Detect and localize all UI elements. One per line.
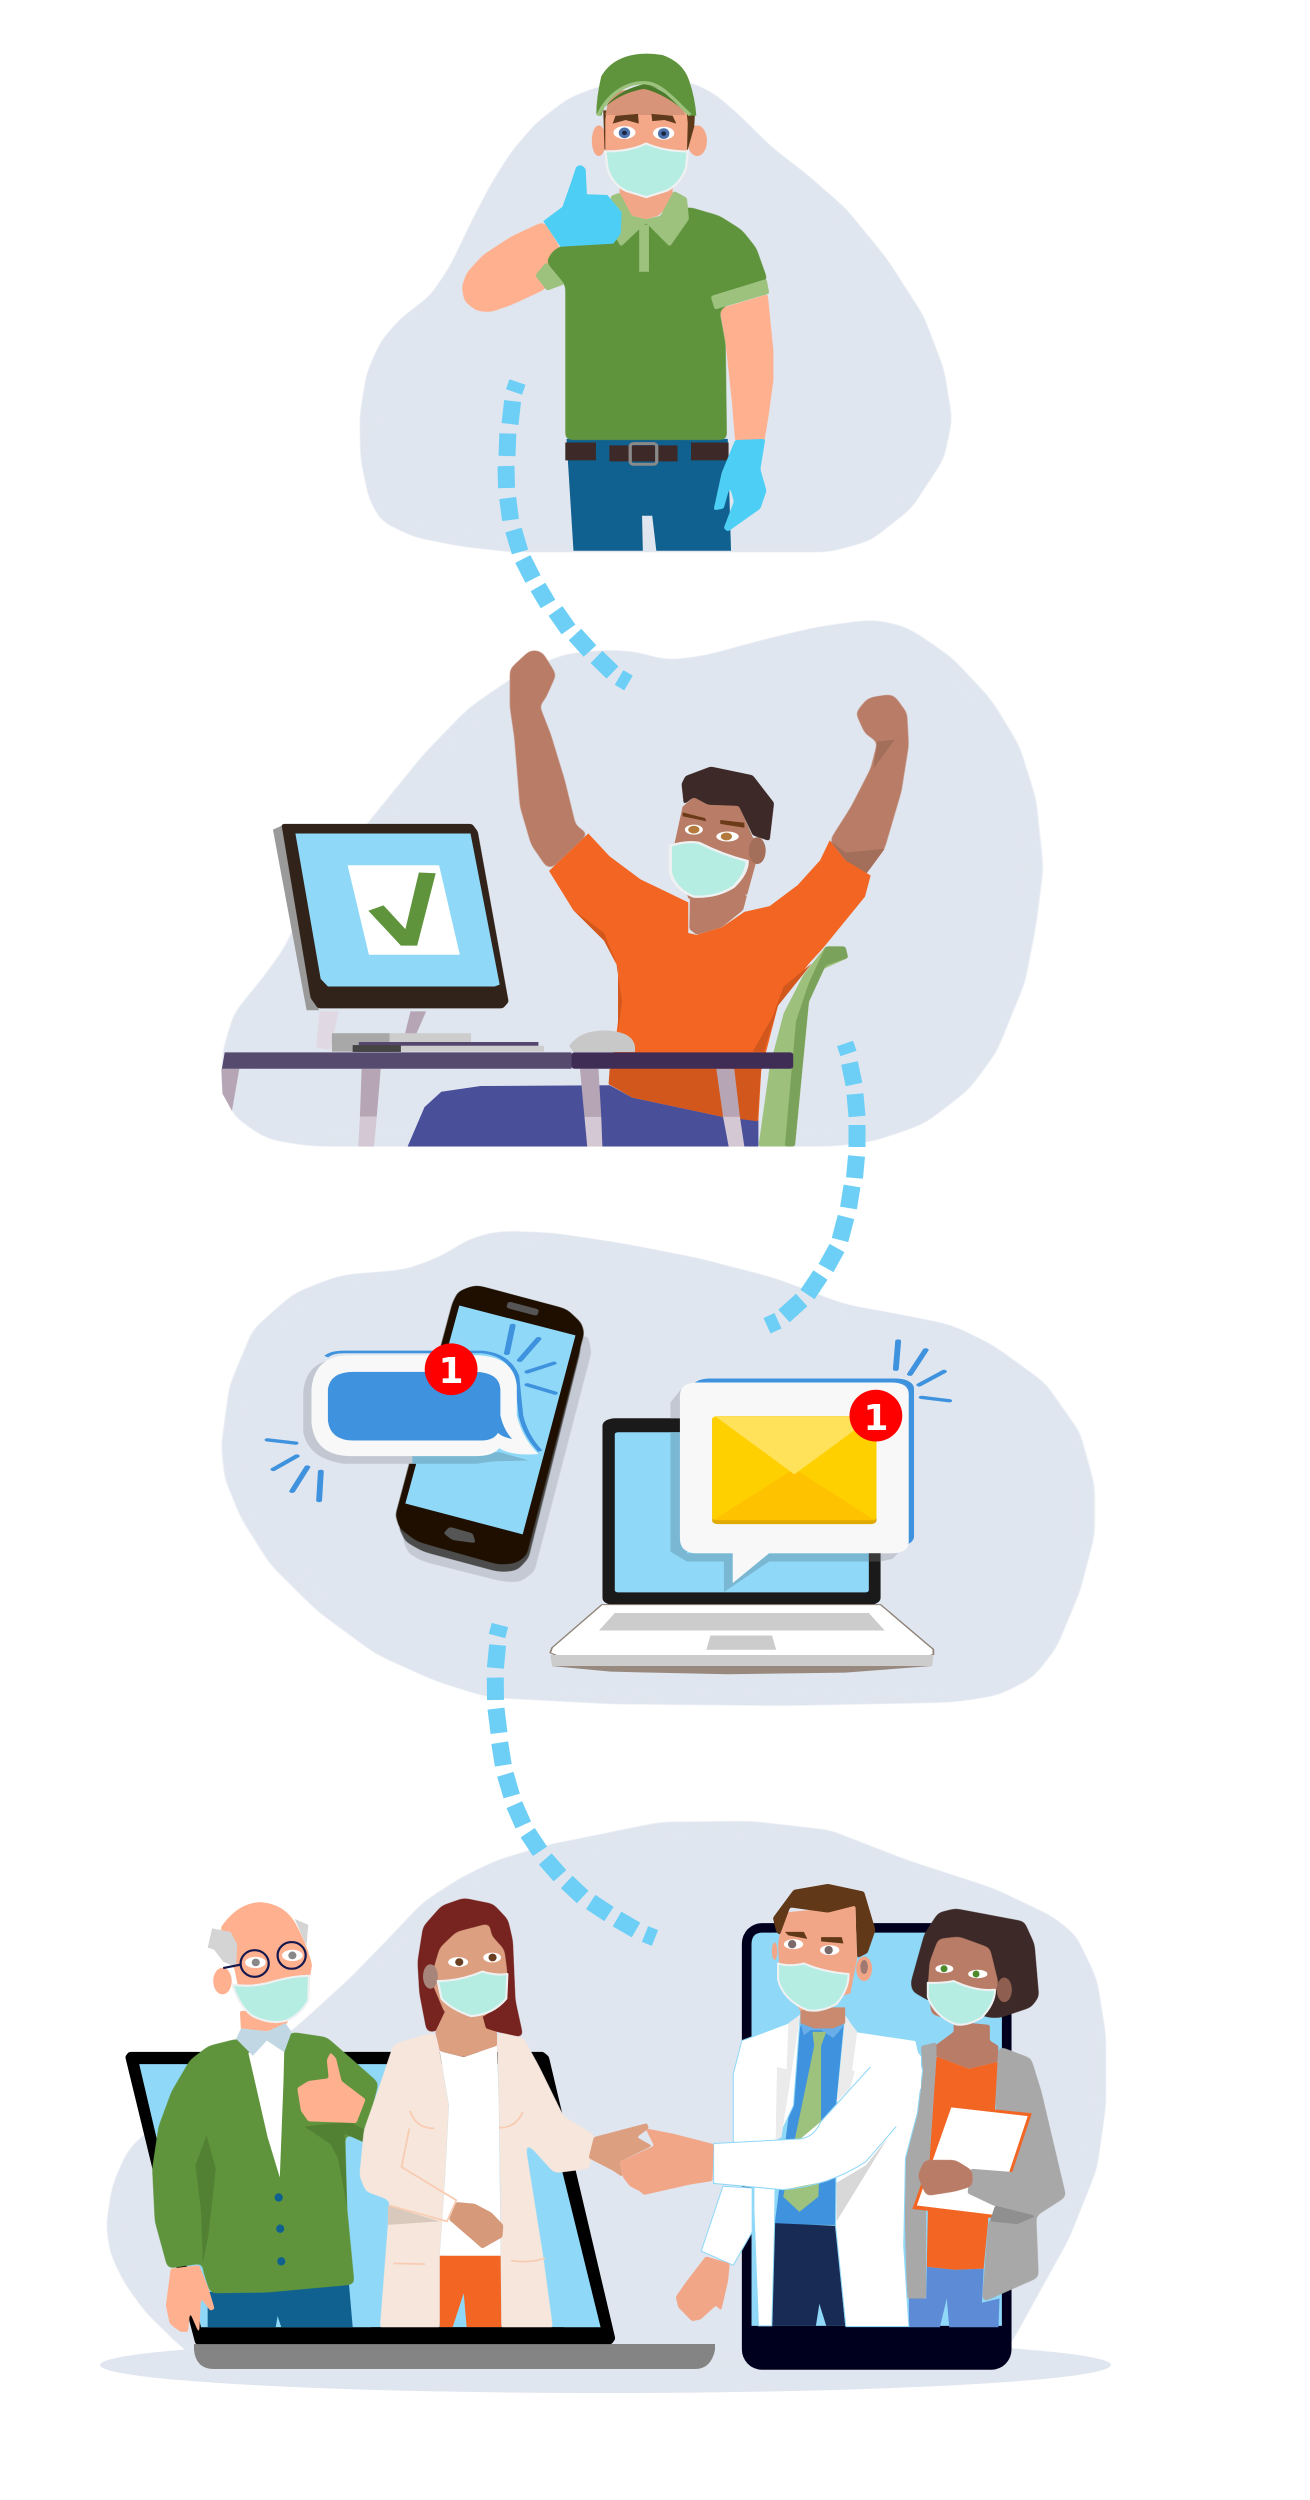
belt: [565, 442, 729, 464]
right woman: sleeve shadow: [990, 2206, 1036, 2224]
dashed connector 3: [495, 1625, 655, 1938]
phone screen: [752, 1933, 1002, 2326]
woman: sleeve shadow: [388, 2206, 440, 2225]
clipboard: [912, 2105, 1032, 2219]
shirt shadows: [573, 910, 812, 1121]
chat badge: [425, 1343, 478, 1395]
laptop base, gray: [194, 2344, 715, 2369]
green polo shirt: [546, 207, 768, 440]
jeans: [567, 439, 731, 551]
dashed connector 2: [767, 1044, 857, 1326]
right woman: ear: [997, 1978, 1012, 2002]
doctor: face: [778, 1906, 857, 2011]
doctor: sleeve lower: [701, 2186, 752, 2265]
woman: ear: [423, 1964, 438, 1989]
keyboard: [353, 1042, 544, 1052]
smartphone: [395, 1285, 584, 1565]
burst lines right: [896, 1341, 949, 1401]
chat bubble shadow: [303, 1359, 417, 1464]
phone speaker: [506, 1301, 539, 1316]
woman: eyes: [448, 1953, 501, 1967]
doctor: arm: [714, 2042, 921, 2190]
doctor: coat shadow: [837, 2137, 888, 2221]
doctor: eyes: [784, 1939, 839, 1955]
arm shadows: [549, 740, 895, 876]
scene 1: delivery man with thumbs up: [360, 54, 952, 552]
doctor: arm outline: [714, 2067, 896, 2190]
monitor: [273, 824, 509, 1010]
raised right arm: [830, 694, 909, 876]
trousers: [408, 1085, 758, 1146]
raised left arm: [510, 649, 588, 871]
email card outline: [692, 1379, 914, 1547]
doctor: coat right: [836, 2014, 923, 2327]
face: [605, 94, 688, 153]
hair: [682, 766, 774, 841]
doctor: neck: [800, 2007, 845, 2028]
scene 3: notifications on phone and laptop: [221, 1231, 1095, 1706]
old man: neck: [240, 2011, 288, 2031]
doctor: trousers: [772, 2223, 845, 2326]
eyes: [613, 126, 674, 140]
doctor: lapel right: [837, 2016, 857, 2102]
woman: hair: [417, 1898, 524, 2038]
face mask: [605, 144, 688, 197]
old man: trousers: [208, 2284, 353, 2327]
burst lines left: [267, 1440, 321, 1501]
eyes: [685, 825, 739, 841]
old man: hand: [166, 2265, 215, 2334]
laptop screen: [139, 2064, 601, 2327]
sleeve trim right: [711, 279, 769, 310]
woman: lab coat right: [497, 2032, 595, 2330]
old man: head: [221, 1902, 312, 1986]
laptop screen bottom edge: [371, 2327, 564, 2331]
woman: white shirt: [440, 2046, 501, 2258]
doctor: hair: [773, 1884, 875, 1958]
face mask: [670, 842, 747, 897]
woman: face: [430, 1923, 507, 2018]
old man: cardigan shadow: [195, 2121, 366, 2263]
right woman: face mask: [928, 1981, 995, 2025]
gloved hand: [713, 439, 767, 532]
old man: buttons: [275, 2193, 285, 2266]
neck: [689, 895, 747, 935]
doctor: lower hand: [676, 2256, 730, 2321]
doctor: eyebrows: [785, 1932, 843, 1943]
eyebrows: [683, 812, 744, 828]
envelope: [712, 1416, 876, 1524]
old man: eyes and glasses: [223, 1942, 306, 1977]
chat bubble message: [328, 1372, 512, 1441]
floor ellipse: [100, 2337, 1111, 2393]
doctor: coat left: [733, 2014, 800, 2326]
scene 4: patients and doctors shaking hands through screens: [100, 1821, 1111, 2393]
chat bubble outline: [326, 1352, 540, 1451]
cap brim: [598, 83, 690, 116]
burst lines on phone: [507, 1325, 555, 1393]
desk top: [222, 1052, 793, 1069]
doctor: ears: [772, 1942, 872, 1981]
right woman: cardigan right: [982, 2046, 1066, 2303]
chat badge count: 1: [438, 1351, 464, 1392]
woman: clasped hand: [449, 2202, 503, 2249]
right woman: sleeve: [967, 2169, 1038, 2216]
old man: ear: [213, 1968, 232, 1994]
doctor: handshake hand: [620, 2128, 714, 2195]
dashed connector 1: [506, 382, 628, 683]
laptop frame: [125, 2052, 615, 2344]
hair sides: [603, 110, 695, 150]
office chair: [758, 946, 848, 1146]
chat bubble shadow on screen: [412, 1452, 529, 1464]
old man: green cardigan: [152, 2032, 379, 2293]
phone shadow: [402, 1329, 591, 1582]
laptop bezel: [602, 1418, 881, 1605]
background blob 3: [221, 1231, 1095, 1706]
old man: gray hair: [208, 1919, 308, 1967]
neck: [620, 184, 673, 219]
ears: [592, 125, 707, 156]
phone lower edge: [398, 1336, 584, 1572]
ear: [749, 837, 766, 864]
right woman: jeans: [909, 2267, 999, 2327]
email card: [680, 1382, 909, 1583]
background blob 2: [221, 619, 1043, 1146]
woman: neck: [435, 2011, 497, 2057]
woman: orange trousers: [440, 2256, 501, 2327]
gloved thumbs up: [543, 165, 622, 247]
doctor: blue shirt: [775, 2025, 845, 2225]
right woman: eyes: [935, 1965, 987, 1978]
email badge count: 1: [863, 1398, 889, 1439]
woman: handshake hand: [589, 2123, 652, 2177]
cap: [596, 54, 696, 116]
old man: collar: [236, 2023, 292, 2056]
old man: white shirt: [248, 2041, 284, 2177]
doctor: lapel left: [776, 2014, 800, 2141]
chair shade: [785, 946, 848, 1146]
cap underside: [599, 84, 689, 116]
laptop base: [550, 1605, 933, 1656]
background blob 1: [360, 82, 952, 552]
desk legs: [221, 1069, 744, 1146]
doctor: face mask: [778, 1963, 849, 2011]
laptop front: [550, 1655, 933, 1666]
laptop keyboard: [599, 1613, 885, 1631]
doctor: collar: [800, 2023, 845, 2038]
phone frame: [742, 1923, 1012, 2370]
eyebrows: [613, 114, 676, 124]
laptop touchpad: [706, 1635, 776, 1650]
woman: coat seam lines: [390, 2111, 545, 2264]
forehead shade: [605, 87, 685, 115]
raised arm: [462, 221, 560, 312]
mouse: [569, 1031, 635, 1052]
sleeve trim: [535, 262, 564, 291]
face: [674, 797, 766, 899]
phone screen: [405, 1306, 575, 1534]
monitor stand: [316, 1011, 471, 1052]
right woman: face: [928, 1936, 998, 2025]
chat bubble: [311, 1355, 539, 1456]
email badge: [849, 1390, 902, 1442]
placket: [639, 225, 649, 272]
right woman: hair: [911, 1908, 1039, 2018]
laptop underside: [551, 1666, 932, 1674]
collar: [611, 191, 689, 247]
right woman: cardigan left: [904, 2042, 936, 2298]
woman: lab coat left: [359, 2032, 449, 2330]
orange t-shirt: [549, 833, 871, 1120]
clipboard paper: [917, 2107, 1028, 2215]
old man: face mask: [232, 1976, 309, 2022]
right woman: hand: [918, 2160, 973, 2196]
right woman: neck: [935, 2021, 998, 2069]
lowered arm: [720, 294, 773, 441]
scene 2: man celebrating at computer: [221, 619, 1043, 1146]
doctor: tie: [783, 2032, 826, 2212]
background blob 4: [106, 1821, 1106, 2370]
right woman: orange top: [927, 2056, 998, 2270]
email card shadow: [671, 1389, 898, 1592]
woman: face mask: [438, 1972, 507, 2016]
phone home button: [443, 1527, 476, 1543]
laptop screen: [615, 1432, 869, 1592]
old man: thumbs up: [297, 2052, 366, 2123]
